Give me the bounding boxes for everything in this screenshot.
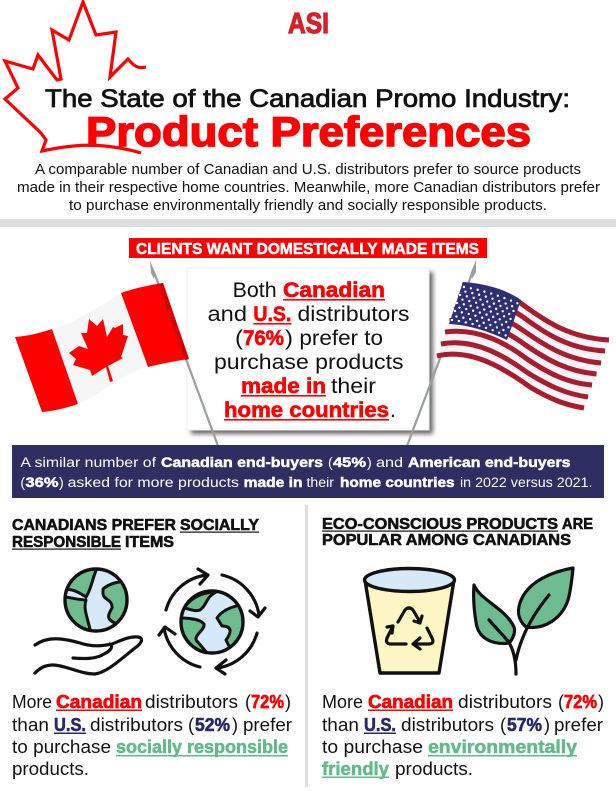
icon: recycled cup (364, 568, 454, 673)
icon: green leaves (474, 568, 573, 674)
panel: similar number of end-buyers: their (306, 475, 334, 491)
text: socially responsible stat: distributors (90, 715, 183, 735)
heading: canadians prefer socially responsible items: SOCIALLY (180, 517, 259, 534)
intro text: made in their respective home countries. Meanwhile, more Canadian distributors prefer (17, 180, 600, 196)
panel: both distributors 76%: home countries (224, 399, 389, 422)
panel: both distributors 76% (187, 268, 433, 434)
heading: eco-conscious products are popular: ARE (562, 516, 593, 533)
panel: both distributors 76%: their (331, 375, 376, 398)
panel: eco-conscious products (322, 516, 604, 779)
panel: both distributors 76%: . (390, 399, 396, 422)
panel: similar number of end-buyers: home countries (340, 475, 455, 491)
text: socially responsible stat: ( (245, 692, 251, 712)
panel: both distributors 76%: ) (285, 327, 293, 350)
text: socially responsible stat: ) (285, 692, 291, 712)
icon: maple leaf outline (5, 2, 146, 153)
text: socially responsible stat: ) (232, 715, 238, 735)
text: environmentally friendly stat: than (322, 715, 359, 735)
text: environmentally friendly stat: 57% (507, 715, 542, 735)
panel: both distributors 76%: U.S. (253, 303, 291, 326)
text: environmentally friendly stat: ) (544, 715, 550, 735)
text: environmentally friendly stat: to purchase (322, 737, 423, 757)
panel: similar number of end-buyers: in 2022 versus 2021. (460, 475, 592, 491)
banner: clients want domestically made items: CLIENTS WANT DOMESTICALLY MADE ITEMS (136, 241, 479, 258)
panel: similar number of end-buyers: 36% (26, 475, 59, 491)
heading: canadians prefer socially responsible items (12, 517, 259, 551)
text: environmentally friendly stat: ) (598, 692, 604, 712)
icon: globe with rotating arrows (159, 569, 265, 674)
panel: both distributors 76%: ( (235, 327, 243, 350)
panel: both distributors 76%: 76% (243, 327, 284, 350)
intro text: to purchase environmentally friendly and socially responsible products. (69, 198, 547, 214)
text: environmentally friendly stat: More (322, 692, 363, 712)
panel: similar number of end-buyers: A similar number of (20, 455, 156, 471)
text: environmentally friendly stat: friendly (322, 759, 389, 779)
title: The State of the Canadian Promo Industry: (45, 85, 570, 113)
heading: eco-conscious products are popular: ECO-CONSCIOUS PRODUCTS (322, 516, 558, 533)
text: environmentally friendly stat: products. (395, 759, 473, 779)
heading: eco-conscious products are popular (322, 516, 593, 549)
panel: similar number of end-buyers: ) (367, 455, 372, 471)
text: environmentally friendly stat: distributors (401, 715, 494, 735)
panel: both distributors 76%: Canadian (283, 279, 385, 302)
panel: similar number of end-buyers (12, 445, 604, 498)
panel: similar number of end-buyers: Canadian end-buyers (161, 455, 323, 471)
heading: canadians prefer socially responsible items: RESPONSIBLE (12, 534, 121, 551)
text: socially responsible stat: socially responsible (116, 737, 288, 757)
panel: both distributors 76%: Both (233, 279, 277, 302)
text: socially responsible stat: More (12, 692, 52, 712)
text: environmentally friendly stat: ( (500, 715, 506, 735)
text: environmentally friendly stat: 72% (564, 692, 597, 712)
text: socially responsible stat (12, 692, 292, 779)
text: socially responsible stat: products. (12, 759, 89, 779)
intro text: A comparable number of Canadian and U.S. distributors prefer to source products (35, 162, 581, 178)
panel: similar number of end-buyers: made in (244, 475, 302, 491)
text: socially responsible stat: 52% (195, 715, 230, 735)
text: environmentally friendly stat: ( (558, 692, 564, 712)
text: socially responsible stat: to purchase (12, 737, 111, 757)
panel: similar number of end-buyers: ( (20, 475, 25, 491)
text: environmentally friendly stat: distributors (458, 692, 552, 712)
text: environmentally friendly stat: U.S. (364, 715, 396, 735)
panel: both distributors 76%: distributors (298, 303, 410, 326)
text: socially responsible stat: than (12, 715, 49, 735)
icon: globe in hand (35, 566, 142, 674)
text: socially responsible stat: U.S. (54, 715, 86, 735)
panel: similar number of end-buyers: 45% (333, 455, 366, 471)
panel: similar number of end-buyers: asked for more products (68, 475, 239, 491)
logo: ASI: ASI (288, 8, 329, 40)
heading: canadians prefer socially responsible items: CANADIANS PREFER (12, 517, 176, 534)
text: socially responsible stat: 72% (251, 692, 284, 712)
panel: both distributors 76%: made in (241, 375, 326, 398)
text: socially responsible stat: ( (188, 715, 194, 735)
panel: both distributors 76%: purchase products (214, 351, 404, 374)
flag: canada (15, 261, 218, 446)
panel: similar number of end-buyers: and (376, 455, 403, 471)
heading: canadians prefer socially responsible items: ITEMS (125, 534, 174, 551)
text: socially responsible stat: distributors (145, 692, 238, 712)
text: environmentally friendly stat: environmentally (428, 737, 577, 757)
heading: product preferences: Product Preferences (86, 108, 531, 155)
heading: eco-conscious products are popular: POPULAR AMONG CANADIANS (322, 532, 571, 549)
text: environmentally friendly stat: Canadian (368, 692, 453, 712)
panel: both distributors 76%: and (208, 303, 247, 326)
text: socially responsible stat: prefer (243, 715, 292, 735)
text: environmentally friendly stat (322, 692, 604, 779)
panel: similar number of end-buyers: ) (59, 475, 64, 491)
intro text (17, 162, 600, 214)
text: socially responsible stat: Canadian (56, 692, 142, 712)
text: environmentally friendly stat: prefer (554, 715, 603, 735)
panel: similar number of end-buyers: American end-buyers (408, 455, 571, 471)
flag: united states (407, 260, 610, 446)
panel: similar number of end-buyers: ( (328, 455, 333, 471)
panel: socially responsible (12, 517, 292, 779)
panel: both distributors 76%: prefer to (299, 327, 383, 350)
